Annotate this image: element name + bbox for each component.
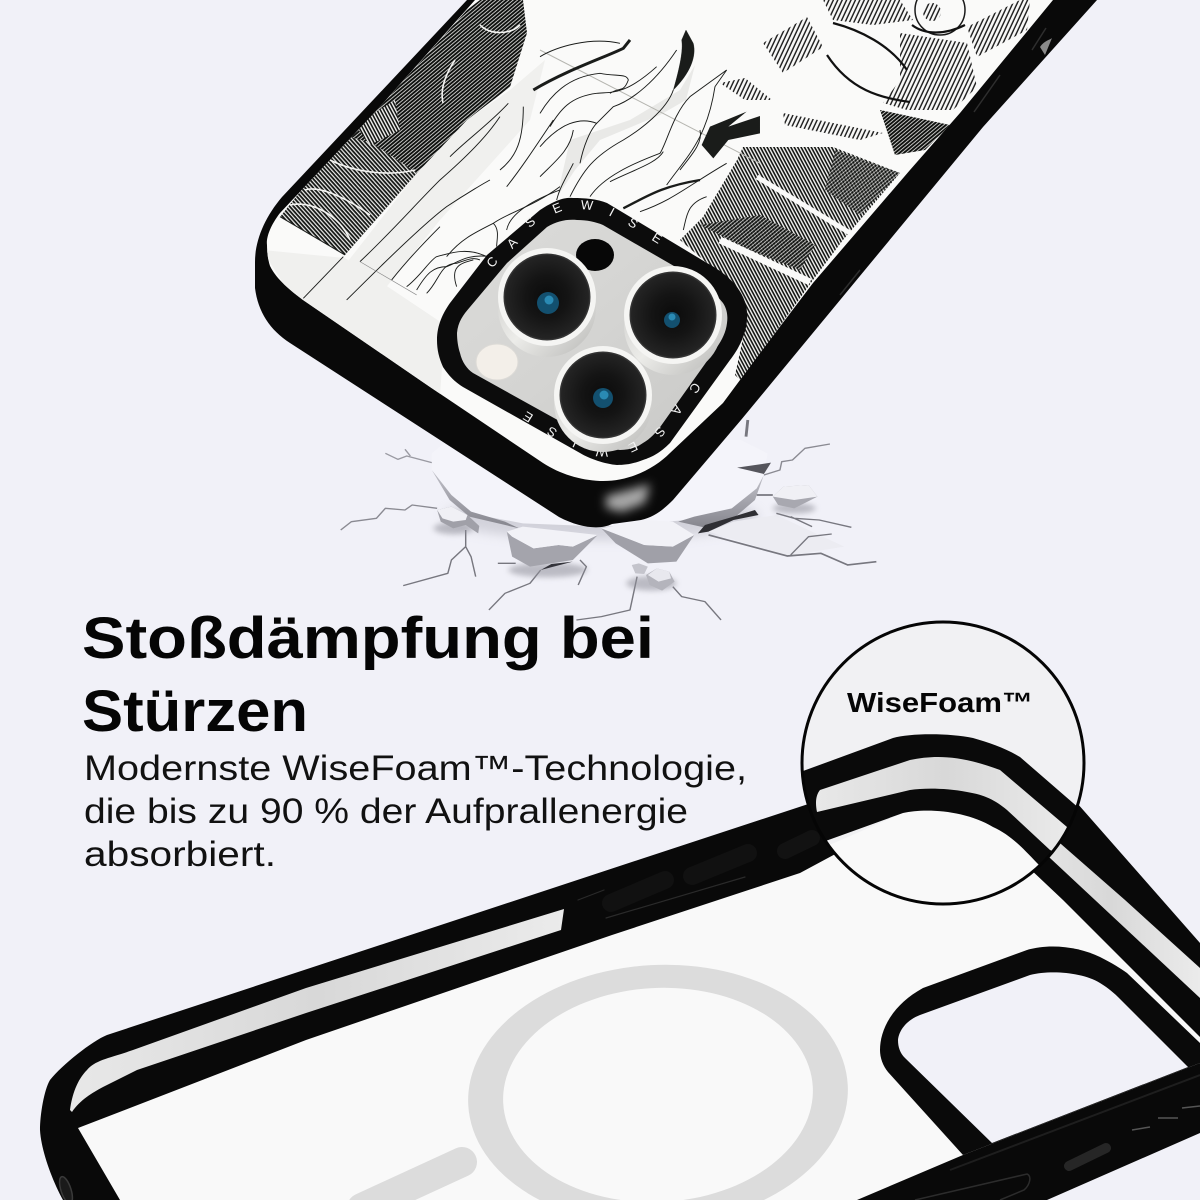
dark leaf: [702, 112, 760, 158]
ring label bottom: [520, 380, 704, 460]
ring label top: S: [522, 213, 538, 231]
raised cracked plate: [432, 440, 767, 527]
impact shadow: [444, 493, 759, 540]
ring label top: C: [483, 254, 501, 270]
side button details: [840, 28, 1052, 295]
camera island: [437, 197, 747, 465]
artwork paper: [250, 0, 1100, 490]
body text: absorbiert.: [84, 835, 276, 874]
artwork grey panels: [262, 60, 695, 395]
case outer frame: [40, 740, 1200, 1200]
body text: Modernste WiseFoam™-Technologie,: [84, 749, 747, 788]
camera cutout frame: [880, 946, 1200, 1155]
magnifier callout: WiseFoam: [800, 620, 1086, 906]
heading: Stürzen: [82, 679, 308, 744]
bottom side button and ports: [915, 1075, 1200, 1200]
plate edges: [432, 463, 844, 556]
magnifier label: WiseFoam™: [847, 687, 1033, 718]
heading: Stoßdämpfung bei: [82, 606, 654, 671]
magnifier outline: [802, 622, 1084, 904]
lens 3: [554, 346, 652, 452]
ring label top: A: [504, 234, 521, 251]
ring label bottom: S: [544, 423, 560, 441]
rock fragment: centre left: [507, 527, 598, 570]
bumper shine: [606, 484, 650, 512]
hatching: figure top right: [720, 0, 1030, 155]
rock fragments: small bottom: [632, 563, 675, 591]
foam strip left: [70, 909, 564, 1112]
bottom left port: [57, 1175, 75, 1200]
top phone with patterned case: [250, 0, 1100, 527]
line drawing: centre: [507, 30, 760, 230]
magnifier background: [802, 622, 1084, 904]
ring label top: S: [625, 214, 641, 232]
hatching: right foliage: [680, 147, 900, 385]
heading: [82, 606, 654, 744]
body text: die bis zu 90 % der Aufprallenergie: [84, 792, 688, 831]
ring label top: E: [649, 229, 665, 247]
crack lines: [341, 420, 876, 620]
ring label top: E: [550, 199, 564, 217]
ring label bottom: A: [668, 402, 686, 418]
flash: [476, 344, 518, 380]
case black bumper: [255, 0, 1097, 527]
ring label top: I: [607, 205, 617, 219]
body text: [84, 749, 747, 874]
microphone hole: [576, 239, 614, 271]
hatching: left foliage: [280, 0, 527, 255]
rock fragment: right: [773, 485, 817, 508]
ring label bottom: I: [570, 435, 580, 451]
ring label bottom: C: [686, 380, 704, 396]
lens 1: [498, 248, 596, 357]
illustration: cracked impact surface: [341, 420, 876, 620]
camera ring: [437, 198, 747, 465]
rock fragment: small left: [437, 507, 479, 533]
line drawing: lower left: [280, 103, 560, 300]
lens 2: [624, 266, 722, 375]
clear back panel: [78, 830, 1200, 1200]
ring label bottom: E: [626, 438, 640, 456]
magnetic ring: [461, 955, 855, 1200]
ring label bottom: S: [651, 424, 669, 440]
ring label top: W: [580, 197, 594, 213]
ring label top: [483, 197, 665, 270]
foam strip right: [1020, 830, 1200, 998]
clear case back view: [40, 740, 1200, 1200]
case sketch artwork: [250, 0, 1100, 490]
ring label bottom: E: [520, 408, 536, 426]
magnified frame detail: [804, 734, 1076, 864]
rock fragment: centre right: [601, 520, 694, 563]
fragment shadows: [434, 503, 816, 591]
volume buttons: [578, 838, 812, 918]
magnetic alignment pill: [362, 1162, 462, 1200]
camera plate: [457, 220, 727, 450]
camera cutout window: [898, 972, 1188, 1143]
ring label bottom: W: [595, 444, 608, 460]
